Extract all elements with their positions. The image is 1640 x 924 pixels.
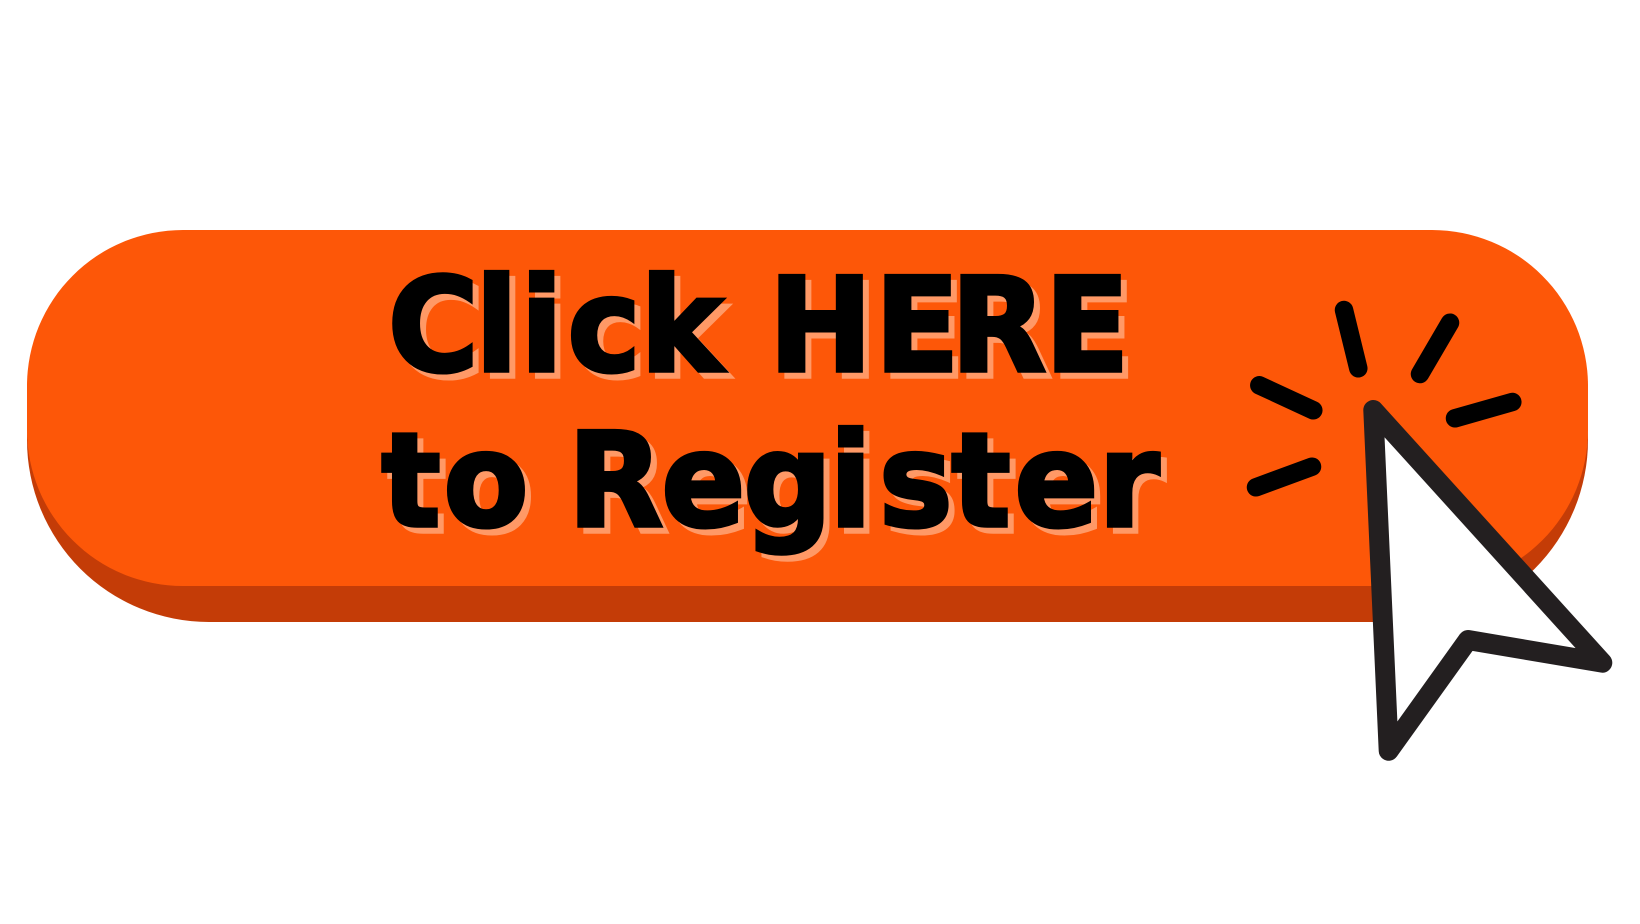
heading: Click HERE to Register: to <box>382 405 528 556</box>
button: face <box>27 230 1588 586</box>
text shadow: Click <box>394 256 731 407</box>
heading: Click HERE to Register: HERE <box>769 250 1129 401</box>
heading: Click HERE to Register: Register <box>568 405 1160 556</box>
text shadow: HERE <box>775 256 1135 407</box>
button: 3D edge <box>27 258 1588 622</box>
heading: Click HERE to Register: Click <box>388 250 725 401</box>
heading: Click HERE to Register <box>382 250 1160 556</box>
icon: click sparks <box>1256 310 1512 487</box>
text shadow <box>388 256 1166 562</box>
icon: mouse cursor arrow <box>1373 410 1602 751</box>
text shadow: to <box>388 411 534 562</box>
text shadow: Register <box>574 411 1166 562</box>
